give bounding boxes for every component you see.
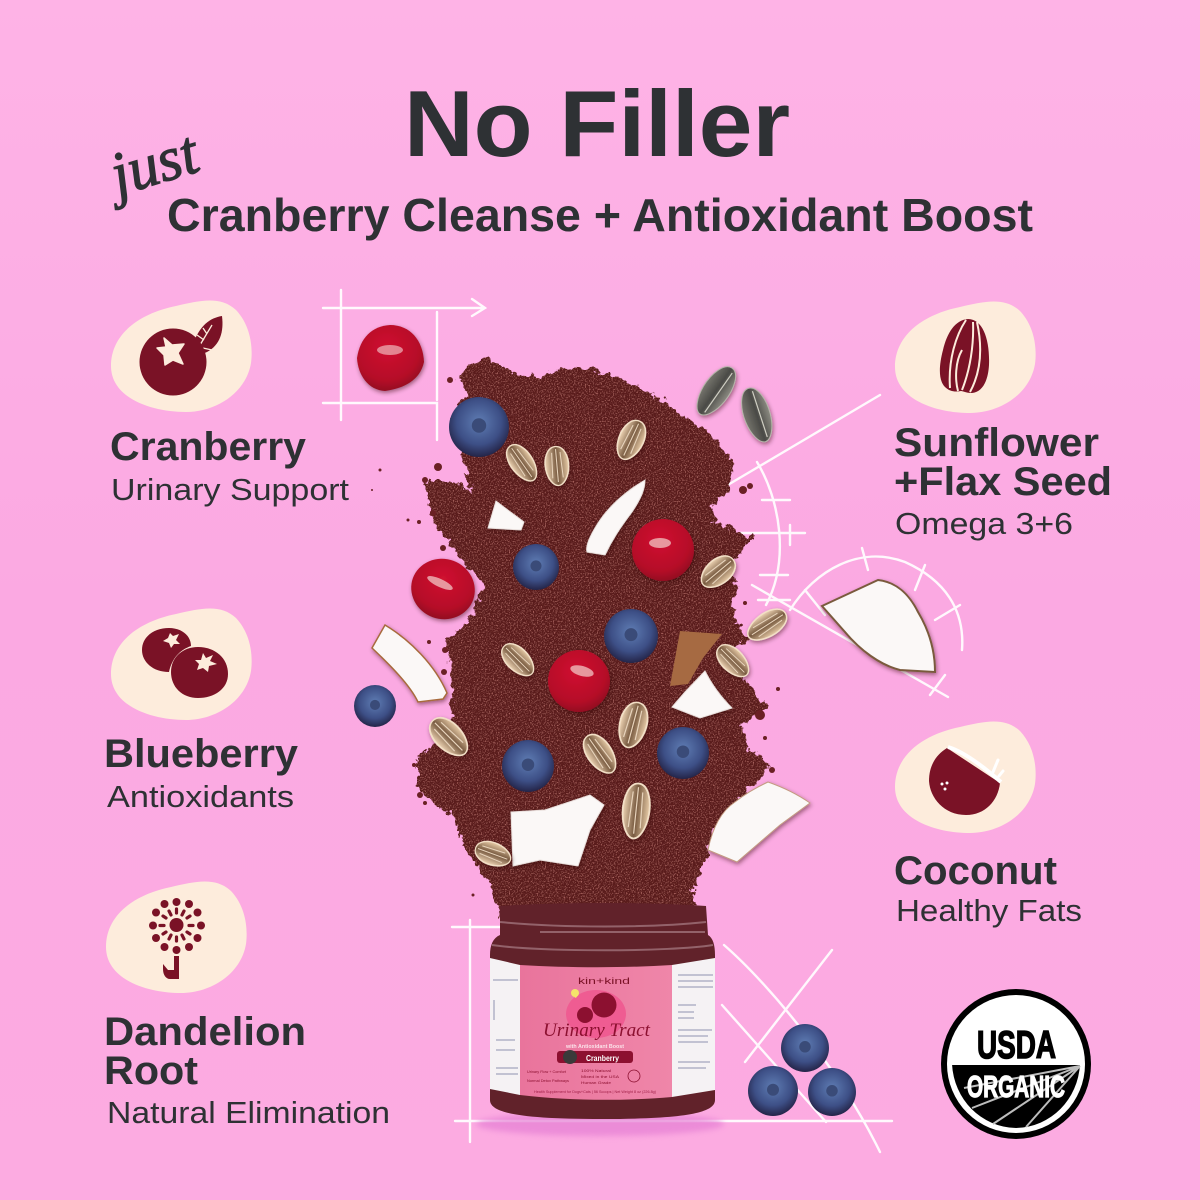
panel: cranberry: [110, 300, 349, 507]
heading: Coconut: Coconut: [894, 849, 1057, 893]
caption: Omega 3+6: Omega 3+6: [895, 506, 1073, 541]
icon: cranberry: [111, 300, 252, 412]
icon: seed: [895, 302, 1036, 413]
powder crumbs: [371, 377, 780, 896]
jar front label: kin+kind: [578, 976, 630, 986]
coconut bark: [670, 631, 722, 686]
script word: just: just: [96, 118, 208, 211]
jar front label: [520, 965, 672, 1100]
jar: [476, 903, 724, 1136]
blueberries: [354, 397, 856, 1116]
label side panels: [490, 958, 715, 1097]
heading: Sunflower +Flax Seed: Sunflower: [894, 421, 1099, 465]
jar front label: Health Supplement for Dogs+Cats | 56 Scoops | Net Weight 8 oz (226.8g): [534, 1090, 656, 1094]
jar front label: Urinary Tract: [543, 1020, 651, 1041]
USDA Organic badge: [941, 989, 1091, 1139]
icon: coconut: [895, 722, 1036, 833]
USDA Organic badge: ORGANIC: [967, 1069, 1065, 1104]
caption: Healthy Fats: Healthy Fats: [896, 893, 1082, 928]
jar neck and body: [490, 903, 715, 1119]
icon: blueberries: [111, 608, 252, 720]
heading: Sunflower +Flax Seed: +Flax Seed: [894, 460, 1112, 504]
jar front label: Normal Detox Pathways: [527, 1079, 569, 1083]
heading: Cranberry: Cranberry: [110, 425, 307, 469]
jar front label: with Antioxidant Boost: [565, 1044, 624, 1050]
USDA Organic badge: USDA: [977, 1024, 1056, 1067]
heading: Dandelion Root: Dandelion: [104, 1010, 306, 1054]
heading: Blueberry: Blueberry: [104, 732, 299, 776]
panel: dandelion root: [104, 882, 390, 1130]
powder: [417, 359, 770, 915]
caption: Antioxidants: Antioxidants: [107, 779, 294, 814]
sunflower seeds: [423, 361, 792, 871]
cranberries: [357, 325, 694, 712]
heading: Sunflower +Flax Seed: [894, 421, 1112, 504]
panel: coconut: [894, 722, 1082, 928]
coconut pieces: [372, 480, 935, 866]
sketch guide lines: [323, 290, 962, 1152]
jar front label: 100% Natural: [581, 1068, 611, 1073]
jar front label: Urinary Flow + Comfort: [527, 1070, 567, 1074]
panel: blueberry: [104, 608, 299, 814]
jar front label: Cranberry: [586, 1054, 619, 1063]
title: No Filler: [404, 71, 790, 176]
jar shadow: [476, 1112, 724, 1136]
subtitle: Cranberry Cleanse + Antioxidant Boost: [167, 189, 1033, 241]
panel: sunflower and flax seed: [894, 302, 1112, 541]
powder pile with ingredients: [354, 325, 935, 1116]
caption: Natural Elimination: Natural Elimination: [107, 1095, 390, 1130]
icon: dandelion: [106, 882, 247, 993]
heading: Dandelion Root: [104, 1010, 306, 1093]
heading: Dandelion Root: Root: [104, 1049, 198, 1093]
caption: Urinary Support: Urinary Support: [111, 472, 349, 507]
jar front label: Mixed in the USA: [581, 1074, 619, 1079]
jar front label: Human Grade: [581, 1080, 612, 1085]
label side print: [493, 975, 713, 1074]
